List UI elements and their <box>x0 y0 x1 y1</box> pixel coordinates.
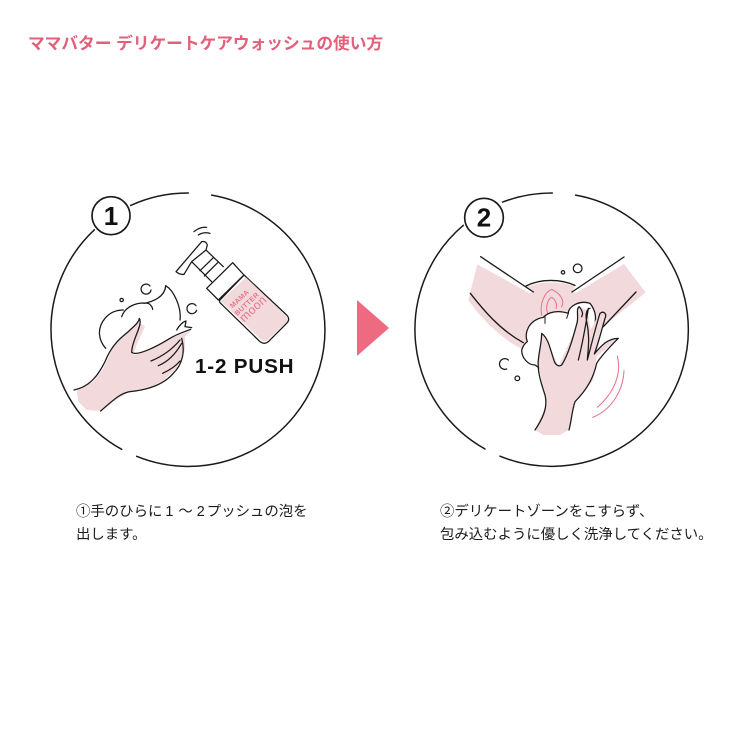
step 2 ring <box>415 193 688 466</box>
bubbles <box>120 284 197 314</box>
foam outline <box>99 286 180 348</box>
icon: foam bottle <box>176 227 289 343</box>
caption: step 1 <box>76 504 308 543</box>
step 1 number badge <box>92 197 130 235</box>
icon: bubbles <box>499 264 582 381</box>
panel: step 2 illustration <box>415 193 688 466</box>
icon: hand with foam <box>74 284 197 411</box>
caption: step 1: ①手のひらに1～ 2プッシュの泡を <box>76 504 308 520</box>
bottle body <box>219 275 289 343</box>
bottle logo: moon <box>236 293 270 325</box>
bottle logo: MAMA <box>229 289 251 310</box>
label: 1-2 PUSH: 1-2 PUSH <box>195 355 294 378</box>
panel: step 1 illustration <box>51 193 325 466</box>
arrow <box>357 300 389 356</box>
caption: step 2 <box>440 504 713 543</box>
hand pink fill <box>77 322 192 411</box>
hand pink fill <box>535 307 618 435</box>
pump motion marks <box>194 227 210 235</box>
bottle collar <box>207 263 244 300</box>
motion lines <box>593 356 624 417</box>
hand outline <box>535 307 618 430</box>
pink folds <box>541 289 563 315</box>
pump head <box>176 241 207 274</box>
step 2 number badge <box>465 198 503 237</box>
hand outline <box>74 318 192 411</box>
step 1 ring <box>51 193 325 466</box>
caption: step 2: ②デリケートゾーンをこすらず、 <box>440 504 654 520</box>
bottle pink label <box>221 277 287 341</box>
bottle logo: BUTTER <box>234 292 261 317</box>
icon: body outline <box>470 257 636 343</box>
step 1 number badge: 1 <box>104 201 118 231</box>
step 2 number badge: 2 <box>477 203 491 233</box>
icon: scrubbing hand with foam <box>522 289 624 435</box>
caption: step 2: 包み込むように優しく洗浄してください。 <box>440 527 713 543</box>
caption: step 1: 出します。 <box>76 527 147 543</box>
icon: body pink fill <box>468 264 646 357</box>
pump stem <box>192 251 223 282</box>
foam <box>522 302 596 370</box>
title: ママバター デリケートケアウォッシュの使い方 <box>28 34 383 53</box>
